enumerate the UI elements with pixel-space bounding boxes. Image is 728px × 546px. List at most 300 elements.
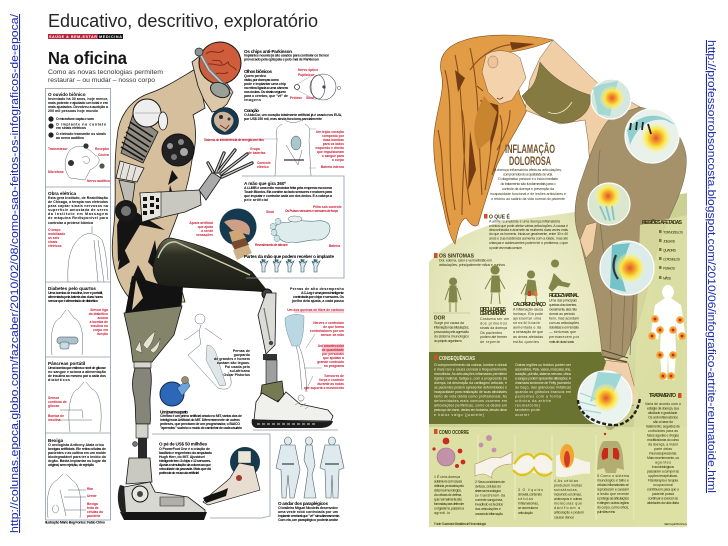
- diagram: leg with c-leg: de que forma: [323, 325, 344, 329]
- foot: [592, 360, 640, 410]
- photo: hand prosthesis circle: Ajuste artificial: [189, 221, 213, 225]
- step 2 joint: causando inflamação: [475, 512, 503, 516]
- step 4 joint: substâncias,: [554, 488, 578, 492]
- hand diagram: [255, 205, 342, 248]
- hand diagram: Bateria: [329, 244, 340, 248]
- text: tratamento: Os anti-inflamatórios: [648, 416, 678, 420]
- circle: ankle: [578, 371, 632, 425]
- text: o andar dos paraplegicos: uma veste robô controlada por um: [278, 510, 338, 514]
- diagram: leg with c-leg: força e controle: [319, 378, 344, 382]
- front hair over face: [474, 96, 497, 150]
- step 2 joint: 2 Seus condutores de: [475, 480, 505, 484]
- bexiga text: [48, 438, 107, 518]
- step 2 joint: das articulações e: [475, 507, 501, 511]
- panel: consequencias: crônica da artrite: [515, 399, 551, 403]
- bexiga text: biodegradável para ter o tecido do: [48, 455, 107, 459]
- pancreas text: contínuo de: [48, 400, 67, 404]
- ouvido bionico text: mais potente e ajudado um total e em: [48, 101, 108, 105]
- heading: INFLAMAÇÃO: [505, 141, 555, 156]
- heading: [505, 141, 555, 168]
- step 2 joint: invadindo os tecidos: [475, 502, 503, 506]
- diagram: leg with c-leg: que ajudam a: [323, 356, 344, 360]
- obra eletrica text: superfície amostada de seres: [48, 208, 108, 212]
- bexiga text: paciente: [87, 514, 101, 518]
- text: coracao: [244, 108, 342, 121]
- hand on leg: [580, 222, 597, 258]
- text: tratamento: corticóides para as: [648, 429, 678, 433]
- text: um jovem esperto: próteses, que precisam de um programador, o BAICO: [160, 422, 240, 426]
- subtitle: restaurar – ou mudar – nosso corpo: [48, 77, 155, 84]
- ouvido bionico text: O ouvido biônico: [48, 92, 86, 97]
- obra eletrica text: os seis: [48, 236, 59, 240]
- description: [490, 168, 566, 201]
- pancreas text: insulina: [48, 418, 61, 422]
- panel: consequencias: mandíbula. As articulações inflamadas permitem: [434, 372, 507, 376]
- step 5 body with lungs: [597, 420, 629, 514]
- step 2 joint: se transferem da: [475, 494, 505, 498]
- diagram: leg with c-leg: Sensores de: [324, 374, 344, 378]
- diagram: leg with c-leg: que suporta o movimento: [304, 386, 344, 390]
- icon: five small hands: [260, 259, 320, 272]
- step 5 body with lungs: a lesão que reveste: [597, 492, 629, 496]
- obra eletrica text: da Instituto em Massagem: [48, 212, 108, 216]
- text: olhos bionicos: Olhos biônicos: [244, 69, 272, 74]
- symptom: dor: provocada pela agressão: [434, 330, 469, 334]
- step 4 joint: produzem muitas: [554, 484, 582, 488]
- bexiga text: feita de: [87, 506, 99, 510]
- diabetes text: Sensor liga: [90, 308, 108, 312]
- text: tratamento: agentes: [655, 460, 671, 464]
- hand diagram: Revestimento de silicone: [255, 243, 288, 247]
- diabetes text: aciona: [98, 316, 108, 320]
- text: tratamento: atividade e gravidade.: [648, 411, 678, 415]
- text: tratamento: paciente possa: [652, 492, 674, 496]
- symptom: dor: do sistema imunológico: [434, 334, 469, 338]
- step 1 cells: o organismo, passam a: [434, 506, 464, 510]
- diagram: eye: Prótese: [290, 96, 302, 100]
- text: um jovem esperto: Cérebro é um primo artificial criado no MIT, vários dos de: [160, 414, 242, 418]
- title: Educativo, descritivo, exploratório: [48, 10, 318, 31]
- description: controle da doença e prevenção da: [502, 187, 554, 191]
- diabetes text: Uma bomba de insulina, leve e portátil,: [48, 291, 103, 295]
- step 4 joint: 4 As células: [554, 479, 578, 483]
- text: chips anti-parkinson: Os chips anti-Parkinson: [244, 49, 292, 54]
- tattoos: [117, 170, 178, 292]
- bexiga text: órgão. Basta implantar no lugar da: [48, 459, 107, 463]
- symptom: calor e inchaco: [513, 271, 546, 344]
- ouvido bionico text: O eletrodo transmite os sinais: [56, 132, 106, 136]
- panel: a mao que gira 360: Touch Bionics. Ela contém ao lado sensores e motores para: [244, 190, 333, 194]
- diagram: leg with c-leg: no programa: [324, 364, 344, 368]
- panel: na oficina infographic: [45, 34, 345, 525]
- diagram: torso with artificial heart: que impulsionam: [317, 150, 344, 154]
- panel: consequencias: deformidades mais comuns ocorrem em: [434, 399, 507, 403]
- step 2 joint: sistema imunológico: [475, 489, 501, 493]
- symptom: dificuldades de movimento: DE MOVIMENTO: [480, 311, 506, 317]
- panel: o pe de 50 milhoes: O pé de US$ 50 milhões: [159, 442, 207, 446]
- diabetes text: a bomba de: [90, 320, 108, 324]
- illustration: bionic man: [112, 34, 333, 520]
- text: tratamento: fases agudas e drogas: [647, 434, 679, 438]
- obra eletrica text: de máquina Redisponível para: [48, 216, 109, 220]
- bexiga text: Bexiga: [87, 502, 98, 506]
- step 5 body with lungs: pulmões e rins: [597, 510, 615, 514]
- column: regioes afetadas: TORNOZELOS: [663, 230, 684, 234]
- pancreas text: [48, 361, 107, 422]
- face: [482, 51, 526, 104]
- panel: o pe de 50 milhoes: Hugh Herr, do MIT. Ajustável: [159, 455, 205, 459]
- diabetes text: do diabético: [89, 312, 108, 316]
- panel: a mao que gira 360: A mão que gira 360º: [244, 181, 286, 186]
- icon: ear diagram: Microfone: [48, 170, 64, 174]
- description: incapacidade funcional e de lesões articulares e: [490, 192, 566, 196]
- heading: DOLOROSA: [509, 154, 551, 168]
- diagram: torso with artificial heart: esquerdo e direito: [315, 146, 344, 150]
- symptom: dificuldades de movimento: podem até tremer: [480, 335, 508, 339]
- icon: ear diagram: Transmissor: [48, 147, 68, 151]
- text: o andar dos paraplegicos: Com ela, um paraplégico poderia andar: [278, 518, 339, 522]
- panel: consequencias: reumatóide): [515, 404, 540, 408]
- panel: a mao que gira 360: pele artificial: [244, 198, 268, 202]
- bexiga text: bexigas artificiais. Ele retira células de: [48, 447, 106, 451]
- pancreas text: diabéticos: [48, 378, 70, 382]
- text: tratamento: Valter Vogel/CBCA Press: [664, 522, 688, 526]
- panel: o pe de 50 milhoes: velocidade da passada. Mais que dá: [159, 467, 211, 471]
- text: coracao: por US$ 250 mil, mas ainda funciona parcialmente: [244, 117, 322, 121]
- diagram: runner and pernas de guepardo: sul-africano: [230, 369, 251, 373]
- step 4 joint: moléculas que: [554, 502, 582, 506]
- panel: a mao que gira 360: que imputar e controlar cada um dos dedos. É a cabeça a: [244, 193, 333, 198]
- symptom: calor e inchaco: as áreas afetadas: [513, 335, 543, 339]
- head band and glasses: [198, 50, 232, 93]
- diagram: eye: Sinal: [306, 96, 314, 100]
- diagram: torso with artificial heart: Um triplo coração: [316, 130, 344, 134]
- step 3 joint: articulação: [518, 511, 533, 515]
- panel: o pe de 50 milhoes: O PowerFoot One é a criação de: [159, 447, 210, 451]
- diagram: torso with artificial heart: duas bombas: [323, 138, 344, 142]
- right vertical link: http://professorrobsoncosta.blogspot.com/2010/06/infografico-artrite-reumatoide.html: [705, 40, 717, 493]
- icon: ear diagram: Cóclea: [98, 153, 109, 157]
- photo: hand prosthesis circle: [189, 208, 256, 260]
- step 3 joint: inflamatórias,: [518, 502, 539, 506]
- symptom: rigidez matinal: dormir ao período: [549, 312, 575, 316]
- text: pernas de alto desempenho: A C-Leg é uma perna inteligente: [301, 291, 344, 295]
- panel: a mao que gira 360: Partes da mão que podem receber o implante: [244, 254, 334, 259]
- caption: Ilustração Mário Bag Fontes: Fabio Cirino: [45, 520, 106, 524]
- step 4 joint: articulação e podem: [554, 510, 584, 514]
- obra eletrica text: [48, 191, 109, 248]
- diagram: runner and pernas de guepardo: guepardo: [234, 353, 251, 357]
- text: chips anti-parkinson: provocado pela epilepsia e pelo mal de Parkinson: [244, 58, 319, 62]
- pants: [575, 107, 686, 360]
- text: coracao: O AbioCor, um coração totalmente artificial já é usado nos EUA,: [244, 113, 342, 117]
- fingers: [208, 150, 252, 177]
- panel: consequencias: e sangue podem apresentar alterações. A: [515, 376, 572, 380]
- symptom: dificuldades de movimento: sinais da doença: [480, 326, 507, 330]
- o que e: A artrite reumatóide é uma doença inflamatória: [489, 220, 560, 224]
- left vertical link: http://colunas.epoca.globo.com/fazcaber/2010/02/08/como-sao-feitos-os-infograficos-de-epoca/: [9, 14, 21, 533]
- bexiga text: pacientes e as cultiva em um molde: [48, 451, 106, 455]
- step 3 joint: [513, 454, 552, 515]
- panel: consequencias: acometidos. Pele, vasos, músculos, rins,: [515, 368, 571, 372]
- text: tratamento: imunobiológicos: [652, 465, 674, 469]
- photo: foot circle: [203, 447, 260, 505]
- description: do tratamento são fundamentais para o: [500, 182, 556, 186]
- panel: consequencias: pacientes com a forma: [515, 394, 561, 398]
- text: tratamento: passaram a compor as: [647, 470, 679, 474]
- o que e: [484, 212, 568, 250]
- column: regioes afetadas: [634, 215, 687, 527]
- text: o andar dos paraplegicos: implante cerebral que "vê" simultaneamente.: [278, 514, 340, 518]
- subtitle: [48, 69, 164, 84]
- shoulder and bionic arm: [115, 99, 252, 222]
- text: tratamento: modificadoras do curso: [647, 438, 679, 442]
- diagram: runner and pernas de guepardo: Pernas de: [233, 349, 250, 353]
- text: olhos bionicos: [244, 69, 289, 102]
- os sintomas: OS SINTOMAS: [439, 254, 475, 260]
- symptom: dificuldades de movimento: Os pacientes: [480, 331, 502, 335]
- bexiga text: Rim: [87, 487, 93, 491]
- description: A doença inflamatória afeta as articulações,: [494, 168, 562, 172]
- o que e: crônica que pode afetar várias articulações. A causa é: [489, 224, 568, 228]
- bexiga text: células do: [87, 510, 103, 514]
- column: regioes afetadas: QUADRIS: [663, 248, 677, 252]
- text: tratamento: contribuem para que o: [647, 488, 679, 492]
- diabetes text: corpo em: [93, 328, 108, 332]
- step 2 joint: defesa, células do: [475, 484, 501, 488]
- sandal straps and sole: [578, 398, 640, 425]
- diagram: eye: Nervo óptico: [298, 68, 318, 72]
- step 4 joint: incluindo enzimas,: [554, 492, 582, 496]
- text: olhos bionicos: Quem perdeu: [244, 74, 266, 78]
- panel: consequencias: incapacidade para realização de suas atividades: [434, 390, 507, 394]
- symptom: calor e inchaco: A inflamação causa: [513, 308, 543, 312]
- text: tratamento: imunossupressoras.: [649, 452, 677, 456]
- prosthetic foot: [118, 458, 207, 520]
- panel: consequencias: e hálux valgo (joanete): [434, 413, 484, 417]
- symptom: calor e inchaco: a sensação de que: [513, 330, 543, 334]
- diagram: runner and pernas de guepardo: Oscar Pistorius: [223, 373, 250, 377]
- step 1 cells: que normalmente são: [434, 498, 462, 502]
- obra eletrica text: Obra elétrica: [48, 191, 77, 196]
- diagram: leg with c-leg: por personais: [322, 352, 344, 356]
- panel: consequencias: doença, há destruição da cartilagem articular, e: [434, 381, 507, 385]
- step 5 body with lungs: e protege as articulações: [597, 496, 629, 500]
- symptom: rigidez matinal: Geralmente, eles não: [549, 308, 577, 312]
- symptom: rigidez matinal: bem, mas acordam: [549, 316, 579, 320]
- symptom: dificuldades de movimento: [480, 266, 509, 344]
- joint inflammation circles: [578, 79, 679, 425]
- obra eletrica text: elétricos: [48, 244, 62, 248]
- text: olhos bionicos: imagens: [244, 98, 261, 102]
- os sintomas: Dor, edema, calor e vermelhidão em: [439, 258, 492, 262]
- step 3 joint: 3 O líquido: [518, 488, 543, 492]
- step 3 joint: células: [518, 497, 533, 501]
- ouvido bionico text: em sinais elétricos: [56, 126, 86, 130]
- panel: consequencias: [429, 352, 610, 424]
- icon: ear diagram: Receptor: [95, 147, 110, 151]
- step 5 body with lungs: e atingem outros órgãos: [597, 501, 629, 505]
- ouvido bionico text: O microfone capta o som: [56, 117, 94, 121]
- dark organs: [162, 134, 194, 166]
- photo: hand prosthesis circle: sensações: [196, 233, 213, 237]
- symptom: dor: inflamação nas articulações,: [434, 326, 469, 330]
- text: tratamento: ocupacional: [653, 483, 673, 487]
- diagram: leg with c-leg: [253, 314, 345, 430]
- section tag: SAÚDE & BEM-ESTAR: [49, 34, 97, 39]
- diagram: leg with c-leg: Nervos e controlam: [313, 321, 344, 325]
- panel: consequencias: é mais raro e causa cervical e frequentemente: [434, 368, 507, 372]
- text: chips anti-parkinson: Implantes neurais já são usados para controlar os tremor: [244, 54, 330, 58]
- description: O diagnóstico precoce e o início imediato: [498, 177, 558, 181]
- step 1 cells: sistema imunológico.: [434, 488, 462, 492]
- obra eletrica text: controlar a prótese biônica: [48, 221, 94, 225]
- symptom: rigidez matinal: permanecem por: [549, 335, 580, 339]
- step 5 body with lungs: 5 Como o sistema: [597, 474, 629, 478]
- text: pernas de alto desempenho: Um dos queixas de fibra de carbono: [287, 308, 344, 312]
- diagram: torso with artificial heart: composto por: [322, 134, 345, 138]
- symptom: dificuldades de movimento: Costuma ser um: [480, 317, 509, 321]
- text: tratamento: Varia de acordo com o: [645, 402, 681, 406]
- column: regioes afetadas: MÃOS: [663, 276, 672, 280]
- o que e: crianças e adolescentes podem ter o problema, o que: [489, 241, 568, 245]
- diagram: runner and pernas de guepardo: de grandes e homem: [214, 357, 250, 361]
- bexiga text: Bexiga: [48, 438, 64, 443]
- diabetes text: [48, 286, 108, 336]
- symptom: calor e inchaco: estão quentes: [513, 340, 539, 344]
- circle: knee: [600, 241, 654, 295]
- circle: shoulder: [591, 79, 631, 119]
- text: tratamento: continuar a exercer as: [648, 496, 678, 500]
- step 5 body with lungs: células inflamatórias se: [597, 483, 629, 487]
- text: um jovem esperto: [160, 410, 243, 430]
- section tag: MEDICINA: [99, 35, 122, 39]
- text: pernas de alto desempenho: [287, 287, 345, 312]
- ouvido bionico text: O implante no contato: [56, 122, 107, 126]
- column: regioes afetadas: PUNHOS: [663, 266, 676, 270]
- text: olhos bionicos: pode e implantar uma chip: [244, 82, 287, 86]
- panel: como ocorre: Fonte: Sociedade Brasileira de Reumatologia: [434, 522, 486, 526]
- text: um jovem esperto: inteligência Artificial do MIT. Diferentemente de outros: [160, 418, 240, 422]
- diagram: runner and pernas de guepardo: [184, 314, 251, 389]
- ouvido bionico text: Inventado há 30 anos, hoje menor,: [48, 97, 108, 101]
- step 3 joint: sinovial, contendo: [518, 492, 542, 496]
- bexiga text: O urologista Anthony Atala criou: [48, 443, 104, 447]
- pancreas text: Pâncreas portátil: [48, 361, 85, 366]
- heading: na oficina: Na oficina: [48, 48, 127, 68]
- panel: a mao que gira 360: A i-LIMB é uma mão mecânica feita pela empresa escocesa: [244, 186, 333, 190]
- icon: torso with bladder: [47, 474, 86, 518]
- o que e: o pode vez mais comum: [489, 246, 522, 250]
- symptom: dor: [433, 278, 470, 343]
- text: tratamento: Mais recentemente, os: [647, 456, 679, 460]
- diagram: torso with artificial heart: para os lados: [323, 142, 344, 146]
- diagram: eye: Pupila/cor: [298, 73, 315, 77]
- panel: como ocorre: [429, 420, 687, 527]
- column: regioes afetadas: JOELHOS: [663, 240, 676, 244]
- diagram: runner and pernas de guepardo: custam são léguas.: [217, 361, 250, 365]
- panel: consequencias: pescoço de cisne, dedos em botoeira, desvio ulnar: [434, 408, 508, 412]
- symptom: dificuldades de movimento: dos primeiros: [480, 322, 507, 326]
- panel: consequencias: do baço, das glândulas linfáticas: [515, 386, 571, 390]
- pancreas text: Sensor: [48, 396, 60, 400]
- column: regioes afetadas: COTOVELOS: [663, 258, 681, 262]
- white body silhouette with orange joints: [648, 285, 686, 380]
- step 1 cells: 1 É uma doença: [434, 474, 460, 479]
- diabetes text: função: [97, 332, 108, 336]
- step 4 joint: causar danos: [554, 516, 574, 520]
- text: o andar dos paraplegicos: [278, 501, 340, 522]
- symptom: calor e inchaco: inchaço. Ela pode: [513, 312, 543, 316]
- diabetes text: sensor que é alimentado de diabético: [48, 299, 99, 303]
- symptom: rigidez matinal: com as articulações: [549, 321, 579, 325]
- circle: wrist: [588, 183, 630, 225]
- text: tratamento: atividades da vida diária: [647, 501, 679, 505]
- subtitle: Como as novas tecnologias permitem: [48, 69, 164, 76]
- text: tratamento: parte delas: [654, 447, 672, 451]
- panel: consequencias: ocorrer: [515, 413, 530, 417]
- icon: ear diagram: [48, 143, 110, 183]
- diabetes text: Diabetes pelo quartos: [48, 286, 96, 291]
- panel: inflamacao dolorosa infographic: [429, 35, 688, 527]
- step 5 body with lungs: imunológico é falho e: [597, 478, 629, 482]
- o que e: O QUE É: [489, 212, 511, 220]
- diagram: eye: [290, 68, 341, 100]
- symptom: calor e inchaco: apresentar uma: [513, 316, 541, 320]
- step 2 joint: corrente sanguínea,: [475, 498, 503, 502]
- panel: consequencias: articulações periféricas, como os dedos em: [434, 404, 507, 408]
- diagram: runner and pernas de guepardo: Foi usada pelo: [225, 365, 251, 369]
- step 1 cells: definida, produzida pelo: [434, 484, 464, 488]
- text: tratamento: Fisioterapia e terapia: [648, 478, 678, 482]
- diagram: torso with artificial heart: Sistema de transferência de energia sem fios: [204, 138, 264, 142]
- hand diagram: Os Pulsos sensores e sensores de força: [285, 209, 338, 213]
- o que e: do que os homens. Inicia-se geralmente, entre 30 e 40: [489, 232, 568, 236]
- symptom: rigidez matinal: — sintomas que: [549, 330, 576, 334]
- text: um jovem esperto: "aprendeu" sozinho o modo de caminhar de cada usuário: [160, 426, 243, 430]
- text: tratamento: estágio da doença, sua: [647, 406, 679, 410]
- panel: consequencias: chamada síndrome de Felty (aumento: [515, 381, 571, 385]
- front lower leg: [252, 289, 333, 428]
- pancreas text: glicose: [48, 404, 60, 408]
- symptom: rigidez matinal: Uma das principais: [549, 298, 577, 302]
- panel: consequencias: O comprometimento da coluna, lombar e dorsal: [434, 363, 507, 367]
- panel: consequencias: coração, pulmão, sistema nervoso, olhos: [515, 372, 571, 376]
- step 4 joint: danificam a: [554, 506, 580, 510]
- panel: consequencias: CONSEQUÊNCIAS: [439, 354, 476, 362]
- diagram: leg with c-leg: Um amortecedor: [318, 344, 345, 348]
- woman's hair back: [434, 35, 553, 244]
- text: tratamento: opções terapêuticas.: [648, 474, 678, 478]
- text: o andar dos paraplegicos: O andar dos paraplégicos: [278, 501, 328, 506]
- panel: sidebar implants: [45, 88, 110, 520]
- text: pernas de alto desempenho: Pernas de alto desempenho: [290, 287, 345, 291]
- photo: hand prosthesis circle: a sentir: [201, 229, 214, 233]
- panel: o pe de 50 milhoes: Ajusta a simulação da coluna ao que: [159, 463, 211, 467]
- text: pernas de alto desempenho: controlada por chips e sensores. Os: [293, 295, 344, 299]
- symptom: rigidez matinal: RIGIDEZ MATINAL: [549, 293, 579, 299]
- diagram: torso with artificial heart: o corpo: [332, 158, 344, 162]
- bexiga text: Ureter: [87, 494, 97, 498]
- os sintomas: [434, 253, 505, 267]
- hand diagram: Sinal: [266, 210, 274, 214]
- obra eletrica text: para captar sinais nervosos na: [48, 204, 109, 208]
- symptom: calor e inchaco: CALOR E INCHAÇO: [513, 302, 546, 308]
- circle: hip: [625, 109, 679, 163]
- diagram: torso with artificial heart: [204, 118, 345, 176]
- ouvido bionico text: mais ajudados. Devolveu a audição a: [48, 105, 109, 109]
- text: olhos bionicos: na retina ligada a uma câmera: [244, 86, 289, 90]
